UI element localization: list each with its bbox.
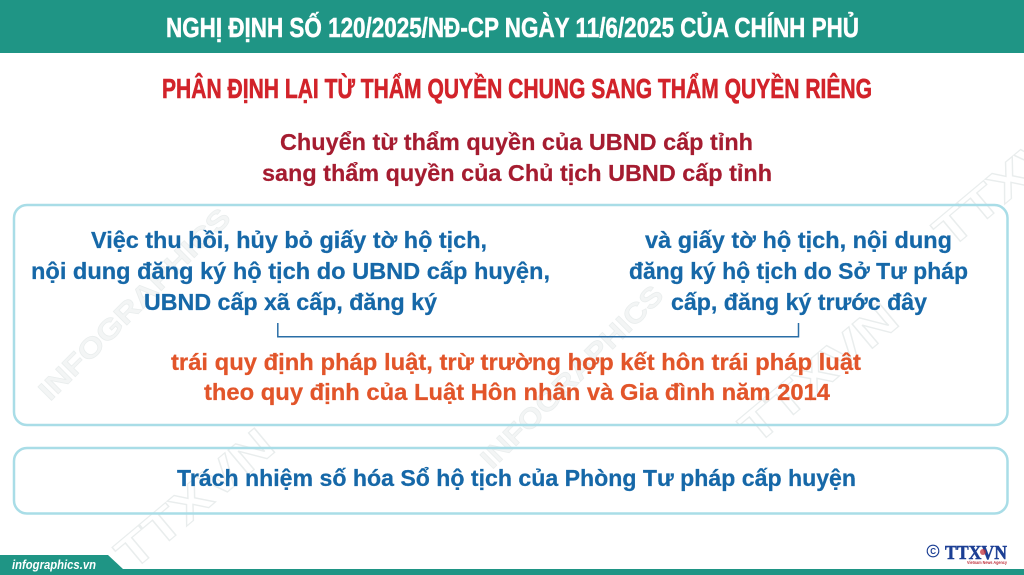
text: INFOGRAPHICS bbox=[474, 279, 669, 474]
left text block: UBND cấp xã cấp, đăng ký bbox=[144, 289, 437, 315]
right text block bbox=[629, 227, 968, 315]
panel: digitization responsibility bbox=[14, 448, 1008, 514]
logo: TTXVN bbox=[927, 542, 1007, 565]
source label: infographics.vn bbox=[12, 557, 96, 572]
exception text bbox=[171, 349, 861, 405]
bracket connector bbox=[278, 323, 798, 337]
right text block: cấp, đăng ký trước đây bbox=[671, 289, 927, 315]
footer bar bbox=[0, 555, 1024, 575]
right text block: và giấy tờ hộ tịch, nội dung bbox=[645, 227, 952, 253]
transfer of authority text: sang thẩm quyền của Chủ tịch UBND cấp tỉnh bbox=[262, 160, 772, 186]
left text block bbox=[31, 227, 550, 315]
title: NGHỊ ĐỊNH SỐ 120/2025/NĐ-CP NGÀY 11/6/2025 CỦA CHÍNH PHỦ bbox=[166, 11, 859, 43]
transfer of authority text bbox=[262, 129, 772, 186]
text: INFOGRAPHICS bbox=[32, 202, 237, 406]
left text block: nội dung đăng ký hộ tịch do UBND cấp huyện, bbox=[31, 258, 550, 284]
logo: TTXVN: TTXVN bbox=[945, 542, 1007, 564]
logo: TTXVN: C bbox=[930, 547, 936, 556]
transfer of authority text: Chuyển từ thẩm quyền của UBND cấp tỉnh bbox=[280, 129, 753, 155]
logo: TTXVN: Vietnam News Agency bbox=[967, 560, 1007, 565]
right text block: đăng ký hộ tịch do Sở Tư pháp bbox=[629, 258, 968, 284]
header banner bbox=[0, 0, 1024, 53]
panel: revocation of civil status documents bbox=[14, 205, 1008, 425]
exception text: theo quy định của Luật Hôn nhân và Gia đình năm 2014 bbox=[204, 379, 830, 405]
text: TTXVN bbox=[729, 292, 908, 454]
exception text: trái quy định pháp luật, trừ trường hợp kết hôn trái pháp luật bbox=[171, 349, 861, 375]
panel: digitization responsibility: Trách nhiệm số hóa Sổ hộ tịch của Phòng Tư pháp cấp huyện bbox=[177, 465, 856, 491]
left text block: Việc thu hồi, hủy bỏ giấy tờ hộ tịch, bbox=[91, 227, 487, 253]
